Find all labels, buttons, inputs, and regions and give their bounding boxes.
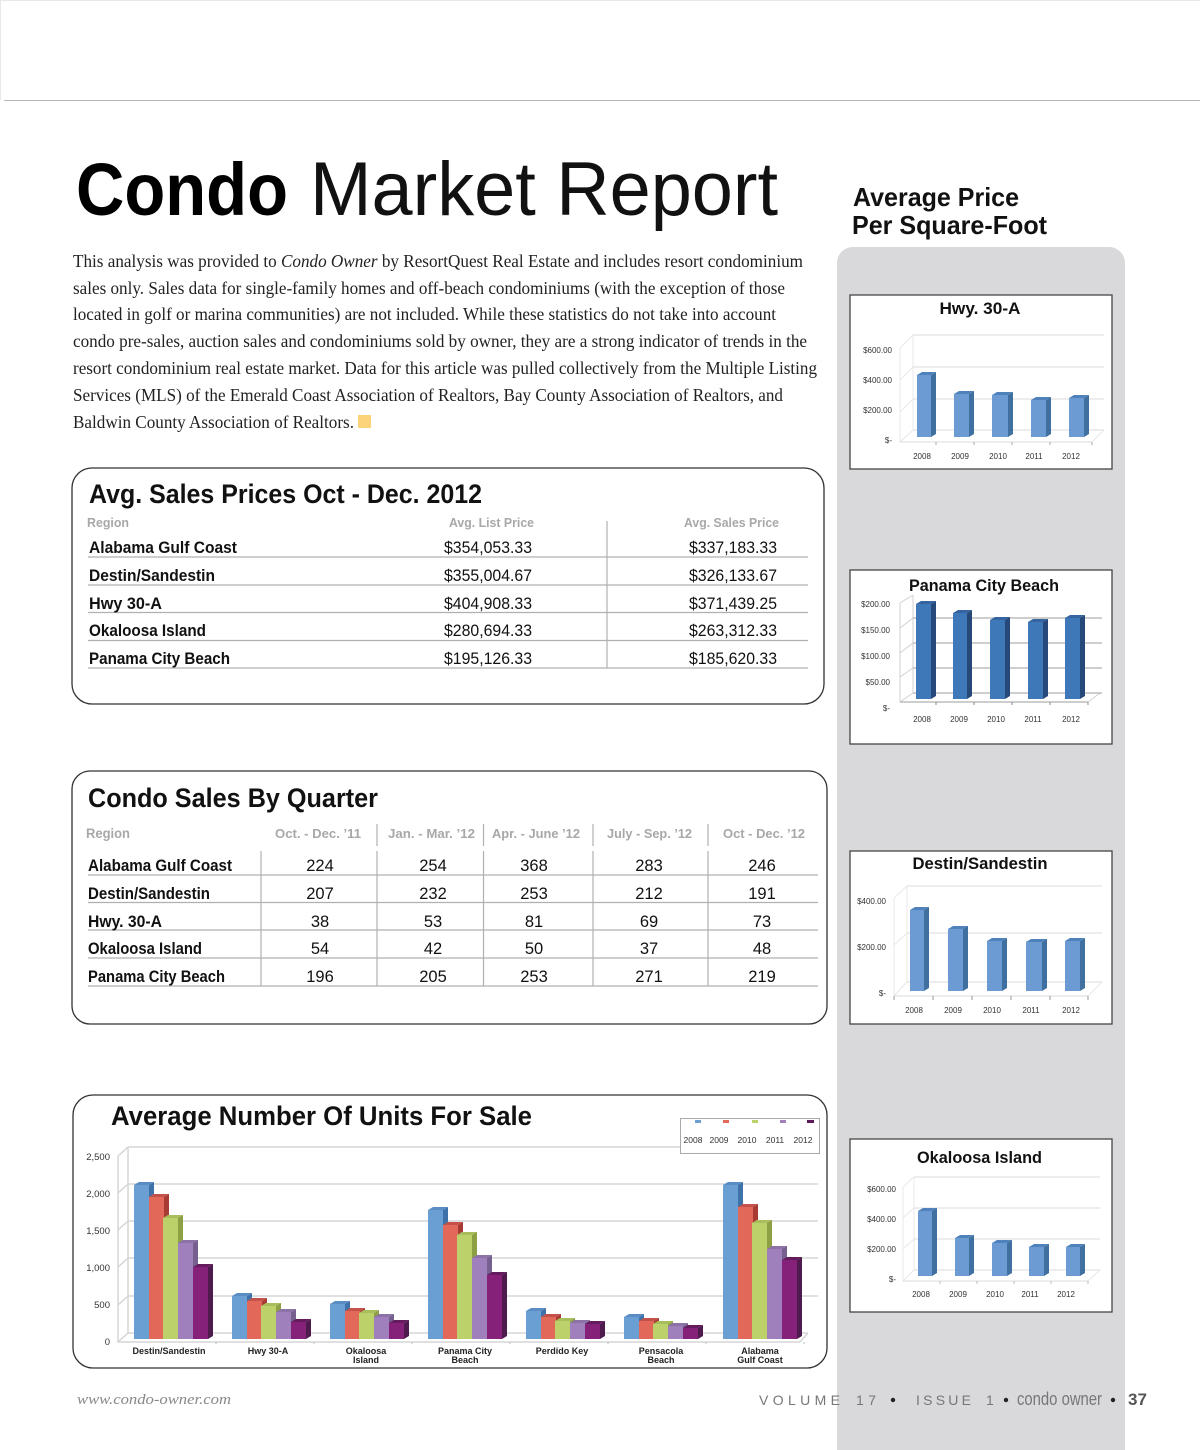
chart: Hwy. 30-A price per square foot: 2008 bbox=[913, 452, 931, 461]
chart legend: 2008 bbox=[684, 1135, 703, 1145]
category labels: Pensacola bbox=[639, 1346, 684, 1356]
chart: Destin/Sandestin price per square foot: $- bbox=[879, 989, 886, 998]
intro text block: Services (MLS) of the Emerald Coast Association of Realtors, Bay County Association of Realtors, and bbox=[73, 385, 783, 405]
panel: average sales prices table: Avg. Sales Prices Oct - Dec. 2012 bbox=[89, 479, 482, 509]
panel: condo sales by quarter table: 283 bbox=[635, 857, 663, 875]
chart: Okaloosa Island price per square foot: 2009 bbox=[949, 1290, 967, 1299]
bar chart axes and gridlines: 1,000 bbox=[86, 1263, 110, 1274]
intro text block: Baldwin County Association of Realtors. bbox=[73, 412, 354, 432]
panel: condo sales by quarter table: 246 bbox=[748, 857, 776, 875]
panel: condo sales by quarter table: 232 bbox=[419, 885, 447, 903]
panel: average sales prices table: $280,694.33 bbox=[444, 622, 532, 640]
category labels: Island bbox=[353, 1355, 379, 1365]
chart: Hwy. 30-A price per square foot: 2010 bbox=[989, 452, 1007, 461]
chart: Okaloosa Island price per square foot bbox=[850, 1139, 1112, 1312]
bar chart axes and gridlines: 500 bbox=[94, 1300, 110, 1311]
panel: condo sales by quarter table: 53 bbox=[424, 913, 442, 931]
panel: average sales prices table: Avg. List Price bbox=[449, 515, 534, 530]
chart: Panama City Beach price per square foot: $200.00 bbox=[861, 600, 891, 609]
chart: Panama City Beach price per square foot: 2009 bbox=[950, 715, 968, 724]
category labels: Gulf Coast bbox=[737, 1355, 783, 1365]
bars: Pensacola Beach bbox=[624, 1314, 703, 1339]
panel: condo sales by quarter table: 191 bbox=[748, 885, 776, 903]
bars: Destin/Sandestin bbox=[134, 1182, 213, 1339]
chart: Hwy. 30-A price per square foot: $400.00 bbox=[863, 376, 893, 385]
panel: condo sales by quarter table: 38 bbox=[311, 913, 329, 931]
chart: Okaloosa Island price per square foot: 2010 bbox=[986, 1290, 1004, 1299]
bars: Perdido Key bbox=[526, 1308, 605, 1339]
panel: condo sales by quarter table: Hwy. 30-A bbox=[88, 913, 162, 931]
chart: Destin/Sandestin price per square foot: 2008 bbox=[905, 1006, 923, 1015]
title: Condo bbox=[76, 148, 288, 231]
chart: Panama City Beach price per square foot: 2008 bbox=[913, 715, 931, 724]
category labels: Panama City bbox=[438, 1346, 492, 1356]
intro text block: located in golf or marina communities) are not included. While these statistics do not take into account bbox=[73, 304, 776, 324]
chart: Destin/Sandestin price per square foot bbox=[850, 851, 1112, 1024]
chart legend: 2010 bbox=[738, 1135, 757, 1145]
chart: Okaloosa Island price per square foot: $400.00 bbox=[867, 1215, 897, 1224]
footer: issue info and page number: VOLUME bbox=[759, 1392, 840, 1408]
footer: issue info and page number bbox=[759, 1389, 1147, 1409]
category labels: Beach bbox=[451, 1355, 479, 1365]
panel: condo sales by quarter table: 212 bbox=[635, 885, 663, 903]
chart: Destin/Sandestin price per square foot: 2012 bbox=[1062, 1006, 1080, 1015]
chart: Destin/Sandestin price per square foot: 2009 bbox=[944, 1006, 962, 1015]
panel: condo sales by quarter table: 271 bbox=[635, 968, 663, 986]
category labels: Hwy 30-A bbox=[248, 1346, 289, 1356]
panel: average sales prices table: $326,133.67 bbox=[689, 567, 777, 585]
bar chart axes and gridlines: 1,500 bbox=[86, 1226, 110, 1237]
sidebar heading bbox=[852, 182, 1047, 240]
bars: Panama City Beach bbox=[428, 1207, 507, 1339]
chart legend bbox=[680, 1118, 820, 1154]
intro text block: condo pre-sales, auction sales and condominiums sold by owner, they are a strong indicator of trends in the bbox=[73, 331, 807, 351]
chart: Panama City Beach price per square foot: $- bbox=[883, 704, 890, 713]
category labels: Beach bbox=[647, 1355, 675, 1365]
chart: Panama City Beach price per square foot: Panama City Beach bbox=[909, 576, 1059, 595]
bars: Hwy 30-A bbox=[232, 1293, 311, 1339]
panel: condo sales by quarter table: 48 bbox=[753, 940, 771, 958]
footer: website: www.condo-owner.com bbox=[77, 1392, 231, 1408]
panel: condo sales by quarter table: 253 bbox=[520, 885, 548, 903]
panel: condo sales by quarter table: Condo Sales By Quarter bbox=[88, 783, 378, 813]
panel: condo sales by quarter table: Oct. - Dec. ’11 bbox=[275, 826, 361, 841]
title: Market Report bbox=[310, 147, 778, 232]
chart: Hwy. 30-A price per square foot: $- bbox=[885, 436, 892, 445]
heading: units for sale: Average Number Of Units For Sale bbox=[111, 1101, 532, 1131]
chart: Okaloosa Island price per square foot: 2008 bbox=[912, 1290, 930, 1299]
icon: end-of-article square bbox=[358, 415, 371, 428]
chart: Okaloosa Island price per square foot: Okaloosa Island bbox=[917, 1148, 1042, 1167]
footer: issue info and page number: ISSUE bbox=[916, 1392, 971, 1408]
panel: condo sales by quarter table: Apr. - June ’12 bbox=[492, 826, 580, 841]
panel: grey sidebar bbox=[837, 247, 1125, 1450]
panel: average sales prices table: Destin/Sandestin bbox=[89, 567, 215, 585]
bar chart axes and gridlines: 2,500 bbox=[86, 1152, 110, 1163]
panel: condo sales by quarter table: Oct - Dec. ’12 bbox=[723, 826, 805, 841]
panel: average sales prices table: Hwy 30-A bbox=[89, 595, 162, 613]
panel: average sales prices table: $404,908.33 bbox=[444, 595, 532, 613]
panel: average sales prices table: Alabama Gulf Coast bbox=[89, 539, 237, 557]
chart: Panama City Beach price per square foot bbox=[850, 570, 1112, 744]
bars: Okaloosa Island bbox=[330, 1301, 409, 1339]
chart: Destin/Sandestin price per square foot: $200.00 bbox=[857, 943, 887, 952]
chart: Destin/Sandestin price per square foot: 2010 bbox=[983, 1006, 1001, 1015]
panel: condo sales by quarter table: 69 bbox=[640, 913, 658, 931]
chart legend: 2009 bbox=[710, 1135, 729, 1145]
footer: issue info and page number: 37 bbox=[1128, 1390, 1147, 1409]
category labels: Perdido Key bbox=[536, 1346, 588, 1356]
chart: Panama City Beach price per square foot: 2011 bbox=[1024, 715, 1042, 724]
sidebar heading: Per Square-Foot bbox=[852, 210, 1047, 240]
title bbox=[76, 147, 778, 232]
panel: average sales prices table: $371,439.25 bbox=[689, 595, 777, 613]
category labels: Alabama bbox=[741, 1346, 780, 1356]
chart: Destin/Sandestin price per square foot: $400.00 bbox=[857, 897, 887, 906]
chart: Panama City Beach price per square foot: 2012 bbox=[1062, 715, 1080, 724]
chart: Hwy. 30-A price per square foot bbox=[850, 295, 1112, 469]
panel: condo sales by quarter table: 219 bbox=[748, 968, 776, 986]
panel: average sales prices table: $263,312.33 bbox=[689, 622, 777, 640]
panel: average sales prices table: $185,620.33 bbox=[689, 650, 777, 668]
panel: condo sales by quarter table: 196 bbox=[306, 968, 334, 986]
chart: Destin/Sandestin price per square foot: Destin/Sandestin bbox=[912, 854, 1048, 873]
chart legend: 2011 bbox=[766, 1135, 784, 1145]
chart: Okaloosa Island price per square foot: $600.00 bbox=[867, 1185, 897, 1194]
bars: Alabama Gulf Coast bbox=[723, 1182, 802, 1339]
panel: average sales prices table: Panama City Beach bbox=[89, 650, 230, 668]
panel: condo sales by quarter table: 207 bbox=[306, 885, 334, 903]
chart: Panama City Beach price per square foot: $100.00 bbox=[861, 652, 891, 661]
panel: condo sales by quarter table: Panama City Beach bbox=[88, 968, 225, 986]
chart: Hwy. 30-A price per square foot: $200.00 bbox=[863, 406, 893, 415]
footer: issue info and page number: 1 bbox=[986, 1392, 994, 1408]
panel: average sales prices table: Okaloosa Island bbox=[89, 622, 206, 640]
panel: average sales prices table: $337,183.33 bbox=[689, 539, 777, 557]
intro text block: sales only. Sales data for single-family homes and off-beach condominiums (with the exception of those bbox=[73, 278, 785, 298]
panel: condo sales by quarter table: 205 bbox=[419, 968, 447, 986]
chart: Hwy. 30-A price per square foot: 2009 bbox=[951, 452, 969, 461]
panel: condo sales by quarter table: Alabama Gulf Coast bbox=[88, 857, 232, 875]
intro text block bbox=[73, 251, 817, 432]
panel: condo sales by quarter table: Okaloosa Island bbox=[88, 940, 202, 958]
panel: average sales prices table bbox=[72, 468, 824, 704]
panel: condo sales by quarter table: 224 bbox=[306, 857, 334, 875]
chart: Panama City Beach price per square foot: $50.00 bbox=[866, 678, 891, 687]
footer: issue info and page number: condo owner bbox=[1017, 1389, 1102, 1409]
intro text block: This analysis was provided to Condo Owner by ResortQuest Real Estate and includes resort condominium bbox=[73, 251, 803, 271]
chart: Hwy. 30-A price per square foot: $600.00 bbox=[863, 346, 893, 355]
category labels: Okaloosa bbox=[346, 1346, 387, 1356]
panel: average sales prices table: Region bbox=[87, 515, 129, 530]
panel: condo sales by quarter table: 368 bbox=[520, 857, 548, 875]
bar chart axes and gridlines: 0 bbox=[105, 1337, 110, 1348]
chart: Okaloosa Island price per square foot: 2012 bbox=[1057, 1290, 1075, 1299]
panel: condo sales by quarter table: 50 bbox=[525, 940, 543, 958]
chart: Hwy. 30-A price per square foot: Hwy. 30-A bbox=[940, 299, 1020, 318]
chart: Okaloosa Island price per square foot: 2011 bbox=[1021, 1290, 1039, 1299]
panel: average sales prices table: $354,053.33 bbox=[444, 539, 532, 557]
bar chart axes and gridlines: 2,000 bbox=[86, 1189, 110, 1200]
panel: condo sales by quarter table: July - Sep. ’12 bbox=[607, 826, 692, 841]
category labels bbox=[132, 1346, 783, 1365]
intro text block: resort condominium real estate market. Data for this article was pulled collectively from the Multiple Listing bbox=[73, 358, 817, 378]
panel: condo sales by quarter table: 42 bbox=[424, 940, 442, 958]
panel: condo sales by quarter table: 81 bbox=[525, 913, 543, 931]
panel: condo sales by quarter table bbox=[72, 771, 827, 1024]
chart: Hwy. 30-A price per square foot: 2011 bbox=[1025, 452, 1043, 461]
panel: condo sales by quarter table: Region bbox=[86, 825, 130, 841]
panel: condo sales by quarter table: 73 bbox=[753, 913, 771, 931]
panel: condo sales by quarter table: 254 bbox=[419, 857, 447, 875]
category labels: Destin/Sandestin bbox=[132, 1346, 206, 1356]
panel: condo sales by quarter table: Destin/Sandestin bbox=[88, 885, 210, 903]
panel: average sales prices table: Avg. Sales Price bbox=[684, 515, 779, 530]
panel: condo sales by quarter table: 37 bbox=[640, 940, 658, 958]
chart: Panama City Beach price per square foot: 2010 bbox=[987, 715, 1005, 724]
panel: condo sales by quarter table: 253 bbox=[520, 968, 548, 986]
sidebar heading: Average Price bbox=[853, 182, 1019, 212]
panel: average sales prices table: $355,004.67 bbox=[444, 567, 532, 585]
chart: Okaloosa Island price per square foot: $200.00 bbox=[867, 1245, 897, 1254]
panel: average number of units for sale bbox=[73, 1095, 827, 1368]
panel: condo sales by quarter table: 54 bbox=[311, 940, 329, 958]
bar chart axes and gridlines bbox=[86, 1147, 818, 1348]
footer: issue info and page number: 17 bbox=[856, 1392, 876, 1408]
chart: Destin/Sandestin price per square foot: 2011 bbox=[1022, 1006, 1040, 1015]
chart legend: 2012 bbox=[794, 1135, 813, 1145]
panel: average sales prices table: $195,126.33 bbox=[444, 650, 532, 668]
panel: condo sales by quarter table: Jan. - Mar. ’12 bbox=[388, 826, 475, 841]
chart: Hwy. 30-A price per square foot: 2012 bbox=[1062, 452, 1080, 461]
chart: Panama City Beach price per square foot: $150.00 bbox=[861, 626, 891, 635]
chart: Okaloosa Island price per square foot: $- bbox=[889, 1275, 896, 1284]
